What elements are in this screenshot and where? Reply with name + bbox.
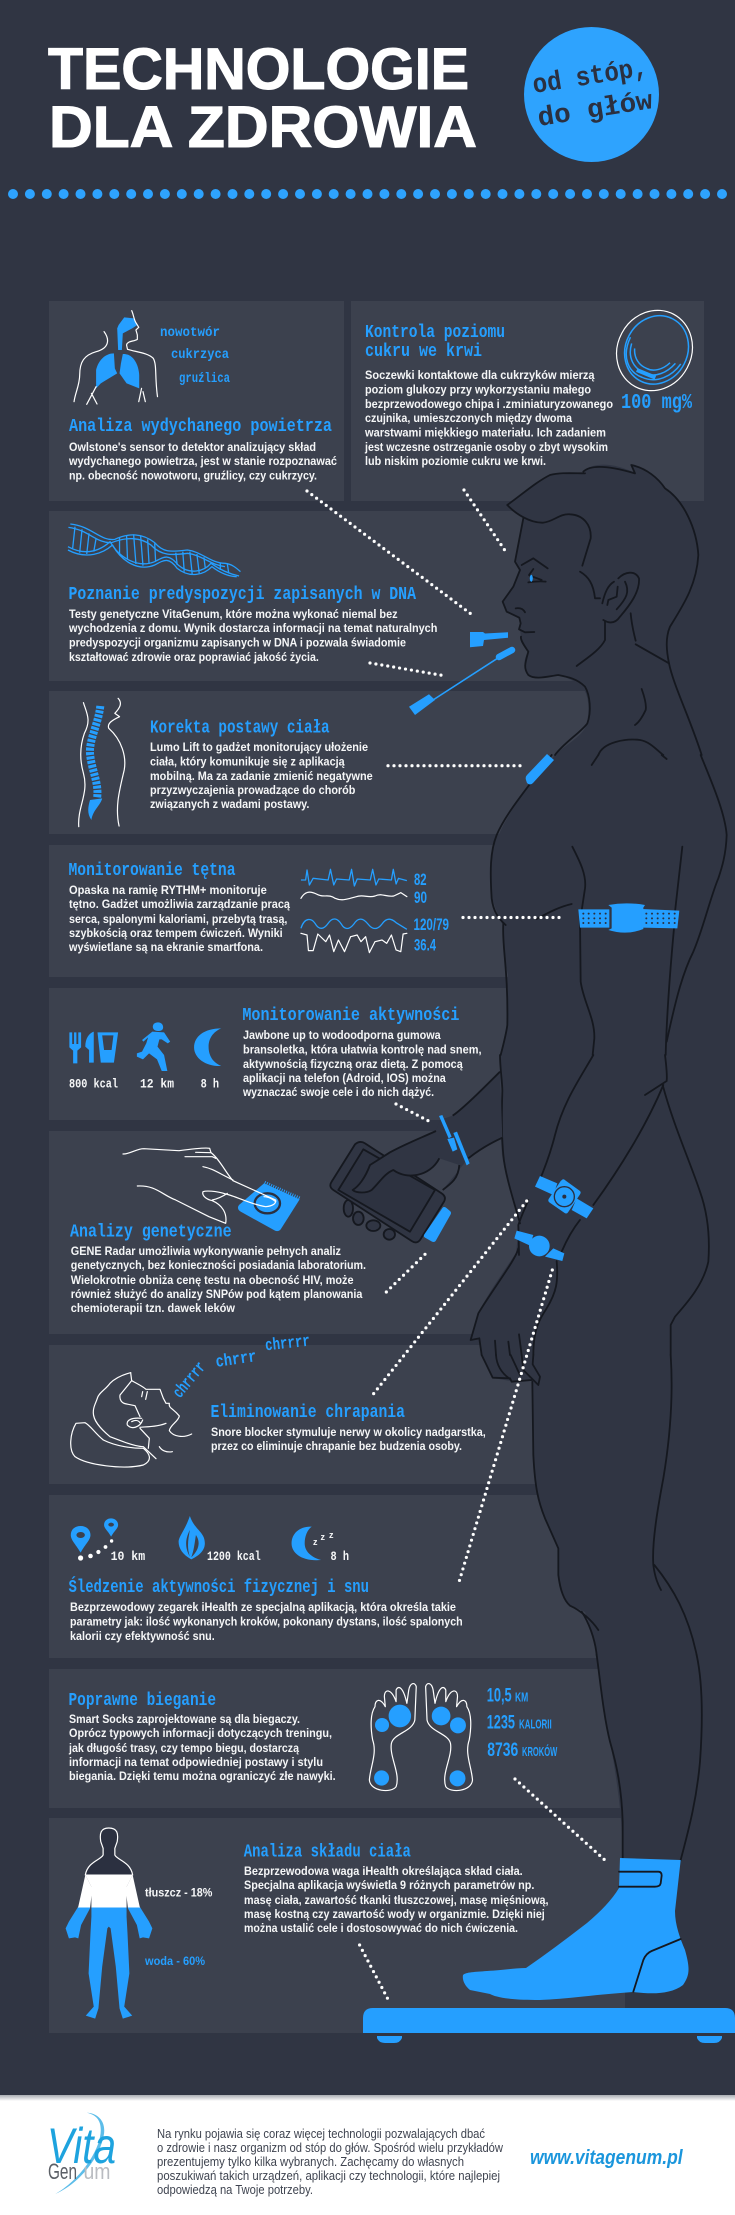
text block: wyświetlane są na ekranie smartfona. — [68, 942, 263, 954]
device: body composition scale — [363, 2008, 735, 2043]
running stats: KROKÓW — [522, 1744, 557, 1759]
text block: aktywnością fizyczną oraz dietą. Z pomocą — [243, 1059, 463, 1071]
heading: Poznanie predyspozycji zapisanych w DNA — [68, 584, 417, 605]
text block — [68, 1714, 336, 1783]
text block: lub niskim poziomie cukru we krwi. — [365, 456, 546, 468]
icon: moon with zzz: z — [320, 1532, 326, 1542]
heading: Monitorowanie aktywności — [242, 1005, 459, 1026]
text block: Jawbone up to wodoodporna gumowa — [243, 1030, 441, 1042]
snoring labels: chrrrr — [170, 1359, 211, 1403]
title: DLA ZDROWIA — [49, 95, 477, 160]
logo: vitagenum: um — [84, 2159, 110, 2184]
vital values: 36.4 — [414, 936, 436, 955]
logo: vitagenum: Gen — [48, 2159, 77, 2184]
text block: wychodzenia z domu. Wynik dostarcza informacji na temat naturalnych — [68, 623, 437, 635]
text block: np. obecność nowotworu, gruźlicy, czy cukrzycy. — [69, 470, 317, 482]
heading: Śledzenie aktywności fizycznej i snu — [68, 1576, 369, 1598]
icon: foot pressure map — [369, 1684, 472, 1791]
heading: cukru we krwi — [365, 341, 482, 362]
heading: Eliminowanie chrapania — [210, 1402, 405, 1423]
heading: Kontrola poziomu — [365, 322, 505, 343]
text block — [211, 1427, 486, 1453]
badge: od stóp do głów: od stóp, — [531, 54, 650, 102]
title: TECHNOLOGIE — [48, 37, 469, 102]
footer text: Na rynku pojawia się coraz więcej technologii pozwalających dbać — [157, 2127, 485, 2141]
text block: bezprzewodowego chipa i .zminiaturyzowanego — [365, 399, 613, 411]
snoring labels: chrrr — [215, 1348, 258, 1373]
arm lines — [471, 1055, 709, 1355]
text block: jest wczesne ostrzeganie osoby o zbyt wysokim — [364, 442, 608, 454]
icon: moon — [194, 1028, 221, 1066]
device: heart rate armband — [578, 903, 679, 933]
device: posture sensor — [526, 754, 554, 784]
torso lines — [491, 755, 727, 1055]
text block: mobilną. Ma za zadanie zmienić negatywne — [150, 771, 373, 783]
tracker values: 10 km — [111, 1549, 145, 1564]
text block — [364, 370, 613, 468]
text block: Wielokrotnie obniża cenę testu na obecność HIV, może — [71, 1275, 354, 1287]
text block: Smart Socks zaprojektowane są dla biegaczy. — [69, 1714, 300, 1726]
device: smart sock on foot — [463, 1858, 689, 2000]
arrow: breath analysis — [307, 491, 475, 617]
arrow: glucose lens — [464, 490, 506, 552]
activity values — [69, 1077, 219, 1092]
snoring labels — [170, 1333, 311, 1403]
device: ihealth watch — [514, 1231, 564, 1261]
disease labels: gruźlica — [179, 371, 230, 387]
text block: genetycznych, bez konieczności posiadania laboratorium. — [71, 1260, 366, 1272]
text block — [68, 609, 437, 664]
panel: analiza wydychanego powietrza — [49, 301, 344, 501]
icon: route pins — [71, 1518, 118, 1561]
title — [48, 37, 477, 160]
head and neck lines — [503, 465, 702, 755]
logo: vitagenum — [47, 2113, 116, 2194]
heading: Analiza wydychanego powietrza — [69, 416, 332, 437]
arrow: jawbone — [396, 1104, 430, 1122]
text block: Oprócz typowych informacji dotyczących treningu, — [69, 1728, 332, 1740]
disease labels: cukrzyca — [171, 347, 230, 363]
text block — [242, 1030, 482, 1099]
disease labels: nowotwór — [160, 325, 220, 341]
text block — [150, 742, 373, 811]
footer text: prezentujemy tylko kilka wybranych. Zachęcamy do własnych — [157, 2155, 464, 2169]
text block: biegania. Dzięki temu można ograniczyć złe nawyki. — [69, 1771, 336, 1783]
icon: sleeping head — [71, 1373, 192, 1467]
running stats — [487, 1686, 557, 1761]
text block: czujnika, umieszczonych między dwoma — [365, 413, 573, 425]
icon: spine — [79, 698, 125, 827]
panel: monitorowanie aktywności — [49, 988, 639, 1120]
activity values: 12 km — [140, 1077, 174, 1092]
text block: jak długość trasy, czy tempo biegu, dostarczą — [68, 1743, 300, 1755]
text block: przez co eliminuje chrapanie bez budzenia osoby. — [211, 1441, 462, 1453]
text block: masę kostną czy zawartość wody w organizmie. Dzięki niej — [244, 1909, 545, 1921]
text block: wyznaczać swoje cele i do nich dążyć. — [242, 1087, 434, 1099]
running stats: 1235 — [487, 1713, 515, 1734]
text block: aplikacji na telefon (Adroid, IOS) można — [243, 1073, 446, 1085]
text block: wydychanego powietrza, jest w stanie rozpoznawać — [68, 456, 338, 468]
text block — [244, 1866, 548, 1935]
footer text: poszukiwań takich urządzeń, aplikacji czy technologii, które najlepiej — [157, 2169, 500, 2183]
text block: Testy genetyczne VitaGenum, które można wykonać niemal bez — [69, 609, 398, 621]
text block: bransoletka, która ułatwia kontrolę nad snem, — [243, 1044, 482, 1056]
phone sensor — [424, 1207, 451, 1242]
text block: związanych z wadami postawy. — [150, 799, 309, 811]
text block — [71, 1246, 366, 1315]
arrow: dna swab — [370, 663, 444, 676]
text block: poziom glukozy przy wykorzystaniu małego — [365, 384, 591, 396]
icon: contact lens — [603, 297, 706, 404]
running stats: KM — [515, 1691, 528, 1705]
tracker values: 8 h — [330, 1549, 349, 1564]
disease labels — [160, 325, 230, 387]
device: snore blocker watch — [535, 1176, 593, 1218]
text block — [68, 442, 338, 482]
activity values: 8 h — [201, 1077, 219, 1092]
vital values: 82 — [414, 870, 427, 889]
panel: monitorowanie tętna — [49, 845, 639, 977]
text block: kalorii czy efektywność snu. — [70, 1631, 215, 1643]
running stats: KALORII — [519, 1718, 552, 1732]
lens value: 100 mg% — [621, 392, 692, 415]
device: dna swab — [409, 650, 512, 715]
arrow: smart socks — [515, 1779, 607, 1862]
phone with fingers — [330, 1142, 445, 1242]
vital values: 90 — [414, 888, 427, 907]
legend: tłuszcz - 18% — [145, 1888, 212, 1900]
activity values: 800 kcal — [69, 1077, 118, 1092]
text block: również służyć do analizy SNPów pod kątem planowania — [71, 1289, 363, 1301]
icon: runner — [137, 1022, 170, 1071]
footer — [0, 2095, 735, 2215]
icon: finger on scanner — [123, 1148, 300, 1231]
text block: Lumo Lift to gadżet monitorujący ułożenie — [150, 742, 368, 754]
footer text: odpowiedzą na Twoje potrzeby. — [157, 2183, 313, 2197]
tracker values: 1200 kcal — [207, 1549, 261, 1564]
snoring labels: chrrrr — [264, 1333, 311, 1356]
arrow: posture sensor — [388, 764, 524, 767]
heading: Poprawne bieganie — [68, 1690, 216, 1711]
icon: body composition silhouette — [66, 1828, 152, 2019]
text block: masę ciała, zawartość tkanki tłuszczowej, masę mięśniową, — [244, 1895, 548, 1907]
text block: warstwami miękkiego materiału. Ich zadaniem — [364, 428, 606, 440]
text block: predyspozycji organizmu zapisanych w DNA i pozwala świadomie — [69, 638, 406, 650]
text block: parametry jak: ilość wykonanych kroków, pokonany dystans, ilość spalonych — [70, 1616, 463, 1628]
chart: vital signs waves — [301, 869, 407, 953]
vital values: 120/79 — [414, 915, 449, 934]
text block: przyzwyczajenia prowadzące do chorób — [150, 785, 355, 797]
wristband — [439, 1115, 470, 1165]
panel: dna — [49, 511, 639, 681]
logo: vitagenum: Vita — [47, 2118, 116, 2174]
eye — [530, 575, 533, 582]
device: arm holding phone with wristband — [330, 1072, 502, 1242]
arrow: armband — [463, 916, 562, 919]
text block — [68, 885, 291, 954]
heading: Analiza składu ciała — [244, 1842, 411, 1863]
text block: Opaska na ramię RYTHM+ monitoruje — [69, 885, 267, 897]
running stats: 10,5 — [487, 1686, 512, 1707]
legend: woda - 60% — [144, 1956, 205, 1968]
badge: od stóp do głów: do głów — [536, 87, 656, 135]
panel: kontrola poziomu cukru — [351, 297, 706, 501]
badge: od stóp do głów — [524, 27, 659, 162]
text block: można ustalić cele i dostosowywać do nich ćwiczenia. — [244, 1923, 518, 1935]
heading: Korekta postawy ciała — [150, 717, 330, 738]
text block: kształtować zdrowie oraz poprawiać jakość życia. — [69, 652, 319, 664]
arrows: dotted leader lines — [307, 490, 607, 1999]
text block: GENE Radar umożliwia wykonywanie pełnych analiz — [71, 1246, 341, 1258]
icon: moon with zzz: z — [329, 1530, 334, 1540]
text block: Bezprzewodowy zegarek iHealth ze specjalną aplikacją, która określa takie — [70, 1602, 456, 1614]
footer text — [157, 2127, 504, 2197]
footer text: o zdrowie i nasz organizm od stóp do głów. Spośród wielu przykładów — [157, 2141, 504, 2155]
icon: moon with zzz — [292, 1527, 334, 1560]
text block: serca, spalonymi kaloriami, przebytą trasą, — [69, 914, 287, 926]
text block: informacji na temat odpowiedniej postawy i stylu — [69, 1757, 323, 1769]
text block: Owlstone's sensor to detektor analizujący skład — [69, 442, 316, 454]
text block: Soczewki kontaktowe dla cukrzyków mierzą — [365, 370, 595, 382]
tracker values — [111, 1549, 349, 1564]
panel: poprawne bieganie — [49, 1669, 639, 1808]
human body silhouette — [471, 465, 727, 1860]
text block: tętno. Gadżet umożliwia zarządzanie pracą — [69, 899, 291, 911]
dotted divider — [8, 189, 727, 199]
arrow: scale — [360, 1945, 388, 1999]
arrow: ihealth watch — [459, 1270, 552, 1581]
vital values — [414, 870, 449, 955]
panel: korekta postawy — [49, 691, 639, 834]
text block: Specjalna aplikacja wyświetla 9 różnych parametrów np. — [244, 1880, 534, 1892]
leg lines — [482, 1355, 697, 1655]
panel: eliminowanie chrapania — [49, 1333, 639, 1484]
legend — [144, 1888, 212, 1968]
text block — [70, 1602, 463, 1643]
icon: lungs — [74, 311, 158, 404]
text block: chemioterapii tzn. dawek leków — [71, 1303, 235, 1315]
text block: Bezprzewodowa waga iHealth określająca skład ciała. — [244, 1866, 523, 1878]
panel: analiza składu ciała — [49, 1818, 625, 2033]
running stats: 8736 — [487, 1740, 518, 1761]
text block: Snore blocker stymuluje nerwy w okolicy nadgarstka, — [211, 1427, 486, 1439]
arrow: snore blocker — [370, 1201, 527, 1398]
arrow: gene radar — [385, 1254, 425, 1293]
device: breath analyzer — [470, 632, 508, 647]
panel: analizy genetyczne — [49, 1131, 639, 1334]
icon: dna helix — [68, 524, 240, 577]
text block: ciała, który komunikuje się z aplikacją — [150, 756, 345, 768]
hand and forearm — [353, 1072, 502, 1192]
heading — [365, 322, 505, 362]
icon: moon with zzz: z — [313, 1537, 318, 1547]
heading: Analizy genetyczne — [70, 1222, 232, 1243]
website url: www.vitagenum.pl — [530, 2147, 683, 2169]
heading: Monitorowanie tętna — [68, 860, 236, 881]
icon: flame — [179, 1516, 205, 1559]
panel: śledzenie aktywności — [49, 1495, 639, 1658]
text block: szybkością oraz tempem ćwiczeń. Wyniki — [69, 928, 283, 940]
icon: fork knife glass — [69, 1032, 118, 1063]
